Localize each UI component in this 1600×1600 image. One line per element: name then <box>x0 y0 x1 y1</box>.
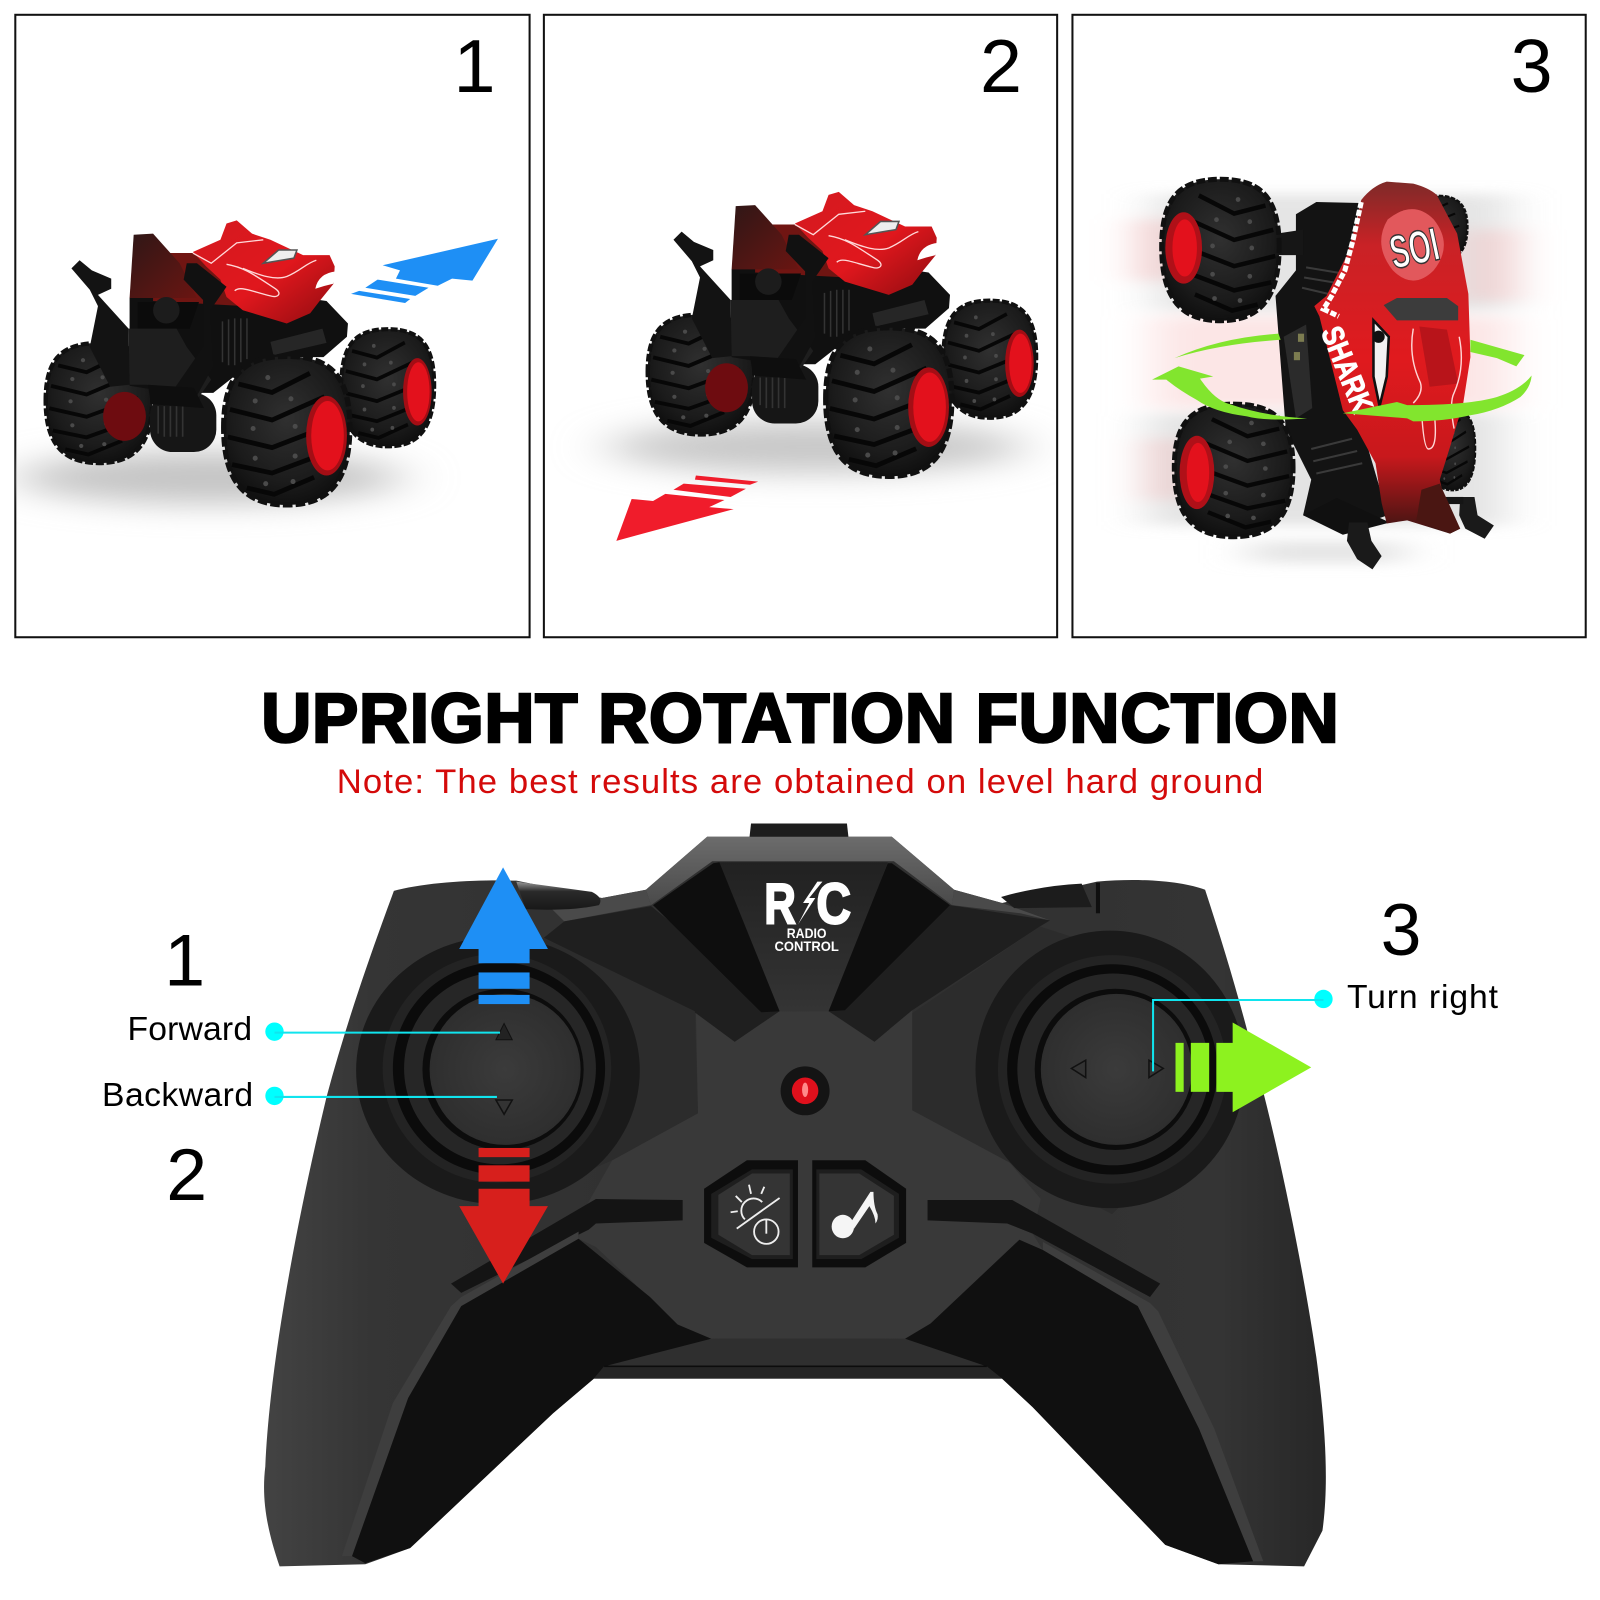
hood scoop <box>1419 327 1458 387</box>
body <box>264 837 1326 1566</box>
right wing <box>829 905 1050 1042</box>
right wedge <box>829 863 950 1011</box>
top knob <box>749 823 849 854</box>
center bottom strip <box>594 1366 1002 1379</box>
left trough <box>451 1199 683 1293</box>
down marker <box>496 1100 512 1114</box>
right lower wedge <box>905 1240 1253 1564</box>
step number 1: 1 <box>453 25 495 109</box>
panel 2: backward <box>544 15 1057 637</box>
label number 2: 2 <box>166 1133 207 1216</box>
right joystick <box>976 931 1245 1208</box>
center badge panel <box>719 862 888 1011</box>
black chassis <box>1276 202 1388 531</box>
bottom left wheel <box>1174 404 1293 537</box>
label number 3: 3 <box>1381 888 1421 971</box>
far wheels behind body <box>1406 196 1467 261</box>
R/C logo: CONTROL <box>774 939 839 955</box>
teeth edge <box>1323 202 1361 316</box>
blue up arrow <box>459 867 548 1004</box>
R/C logo: RADIO <box>787 926 827 942</box>
note: Note: The best results are obtained on level hard ground <box>337 763 1263 801</box>
light and power button <box>704 1160 798 1267</box>
logo lettering: SOI <box>1385 218 1444 279</box>
left wedge <box>653 862 780 1012</box>
turn right callout: Turn right <box>1347 979 1499 1016</box>
left strip <box>551 890 651 921</box>
green rotation arrows <box>1152 334 1532 421</box>
forward callout <box>128 1011 500 1048</box>
truck ground shadow <box>15 451 403 504</box>
left marker <box>1071 1060 1086 1078</box>
lower arms and wheels <box>1347 497 1494 569</box>
panel 1: forward <box>15 15 530 637</box>
music button <box>812 1160 906 1267</box>
top left wheel <box>1162 179 1279 321</box>
center lower recess <box>604 1339 987 1366</box>
left joystick <box>356 937 640 1204</box>
remote controller <box>264 823 1326 1566</box>
step number 3: 3 <box>1511 25 1553 109</box>
right marker <box>1149 1060 1163 1078</box>
forward callout: Forward <box>128 1011 252 1048</box>
left wing <box>544 906 780 1042</box>
left stick plate <box>408 938 698 1214</box>
green right arrow <box>1176 1022 1311 1112</box>
backward callout: Backward <box>102 1077 253 1114</box>
motion blur smear <box>1141 194 1515 563</box>
main face <box>579 1010 1043 1339</box>
title: UPRIGHT ROTATION FUNCTION <box>261 679 1339 757</box>
hood lines <box>1412 329 1461 449</box>
up marker <box>496 1023 512 1040</box>
right shoulder button <box>1001 884 1092 908</box>
backward callout <box>102 1077 497 1114</box>
truck ground shadow <box>607 420 1026 473</box>
red down arrow <box>459 1148 548 1284</box>
right stick plate <box>912 927 1204 1214</box>
tail fin <box>1416 484 1460 534</box>
left rim stripe <box>342 1232 579 1556</box>
left shoulder button <box>516 882 600 910</box>
blue forward arrow <box>351 239 498 303</box>
monster truck driving backward <box>648 192 1036 476</box>
windshield <box>1384 298 1458 320</box>
turn right callout <box>1153 979 1499 1071</box>
LED indicator <box>781 1066 830 1115</box>
step number 2: 2 <box>980 25 1022 109</box>
R/C logo <box>764 872 851 955</box>
shark eye <box>1372 320 1389 406</box>
right trough <box>928 1200 1160 1297</box>
red backward arrow <box>616 476 758 541</box>
right strip <box>952 890 1050 920</box>
hump bevel <box>646 837 954 905</box>
right rim stripe <box>1043 1242 1263 1561</box>
shark lettering: SHARK <box>1314 321 1379 417</box>
panel 3: rotation <box>1072 15 1586 637</box>
left lower wedge <box>352 1239 711 1563</box>
label number 1: 1 <box>164 919 205 1002</box>
R/C logo: R <box>764 872 796 936</box>
R/C logo: C <box>816 872 851 936</box>
splash graphic <box>1381 209 1444 281</box>
monster truck driving forward <box>46 220 434 505</box>
red shark body <box>1314 182 1470 534</box>
